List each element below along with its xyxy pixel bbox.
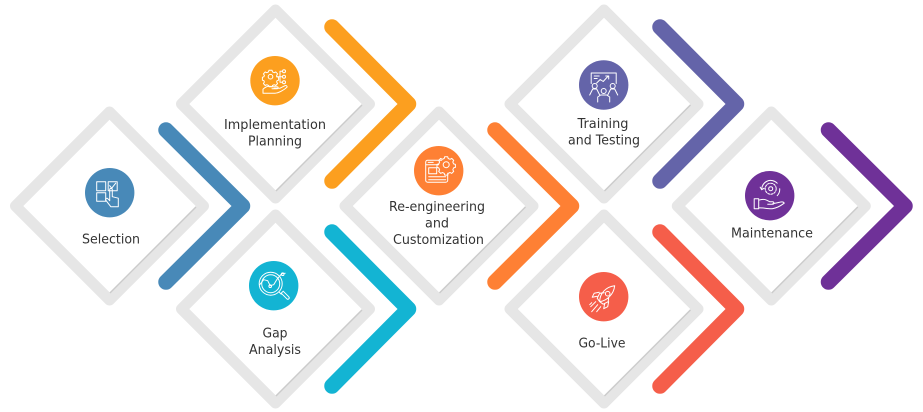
step: Re-engineering and Customization: [345, 112, 572, 300]
chevron: Re-engineering and Customization: [495, 130, 572, 282]
label: Go-Live: Go-Live: [578, 336, 626, 352]
step: Training and Testing: [510, 10, 736, 198]
chevron: Maintenance: [828, 130, 905, 282]
icon: gear cycle over hand: [745, 171, 794, 220]
diamond frame: Selection: [16, 112, 204, 300]
diamond frame: Training and Testing: [510, 10, 698, 198]
label: Training and Testing: and Testing: [568, 132, 640, 148]
chevron: Selection: [166, 130, 242, 282]
diamond frame: Re-engineering and Customization: [345, 112, 533, 300]
step: Implementation Planning: [182, 10, 408, 198]
label: Gap Analysis: Analysis: [249, 342, 301, 358]
chevron: Go-Live: [660, 232, 736, 386]
diamond frame: Maintenance: [677, 112, 865, 300]
icon: selection checklist with hand: [85, 168, 134, 217]
chevron: Training and Testing: [660, 27, 736, 181]
step: Selection: [16, 112, 242, 300]
chevron: Gap Analysis: [332, 232, 408, 386]
step: Go-Live: [510, 215, 736, 403]
icon: presentation board and audience: [579, 60, 628, 110]
icon: browser window with gear: [414, 146, 463, 195]
icon: magnifier with trend line: [249, 261, 298, 310]
label: Selection: Selection: [82, 232, 140, 248]
label: Implementation Planning: Implementation: [224, 117, 326, 133]
label: Re-engineering and Customization: Customization: [393, 232, 484, 248]
diamond frame: Implementation Planning: [182, 10, 370, 198]
label: Re-engineering and Customization: and: [425, 216, 449, 232]
step: Maintenance: [677, 112, 905, 300]
chevron: Implementation Planning: [332, 27, 408, 181]
icon: gear and network over hand: [250, 56, 300, 105]
label: Gap Analysis: Gap: [262, 326, 288, 342]
label: Training and Testing: Training: [577, 116, 628, 132]
icon: rocket: [579, 272, 628, 321]
label: Implementation Planning: Planning: [248, 134, 302, 150]
diamond frame: Gap Analysis: [182, 215, 370, 403]
step: Gap Analysis: [182, 215, 408, 403]
diamond frame: Go-Live: [510, 215, 698, 403]
label: Maintenance: Maintenance: [731, 226, 813, 242]
label: Re-engineering and Customization: Re-engineering: [389, 199, 485, 215]
